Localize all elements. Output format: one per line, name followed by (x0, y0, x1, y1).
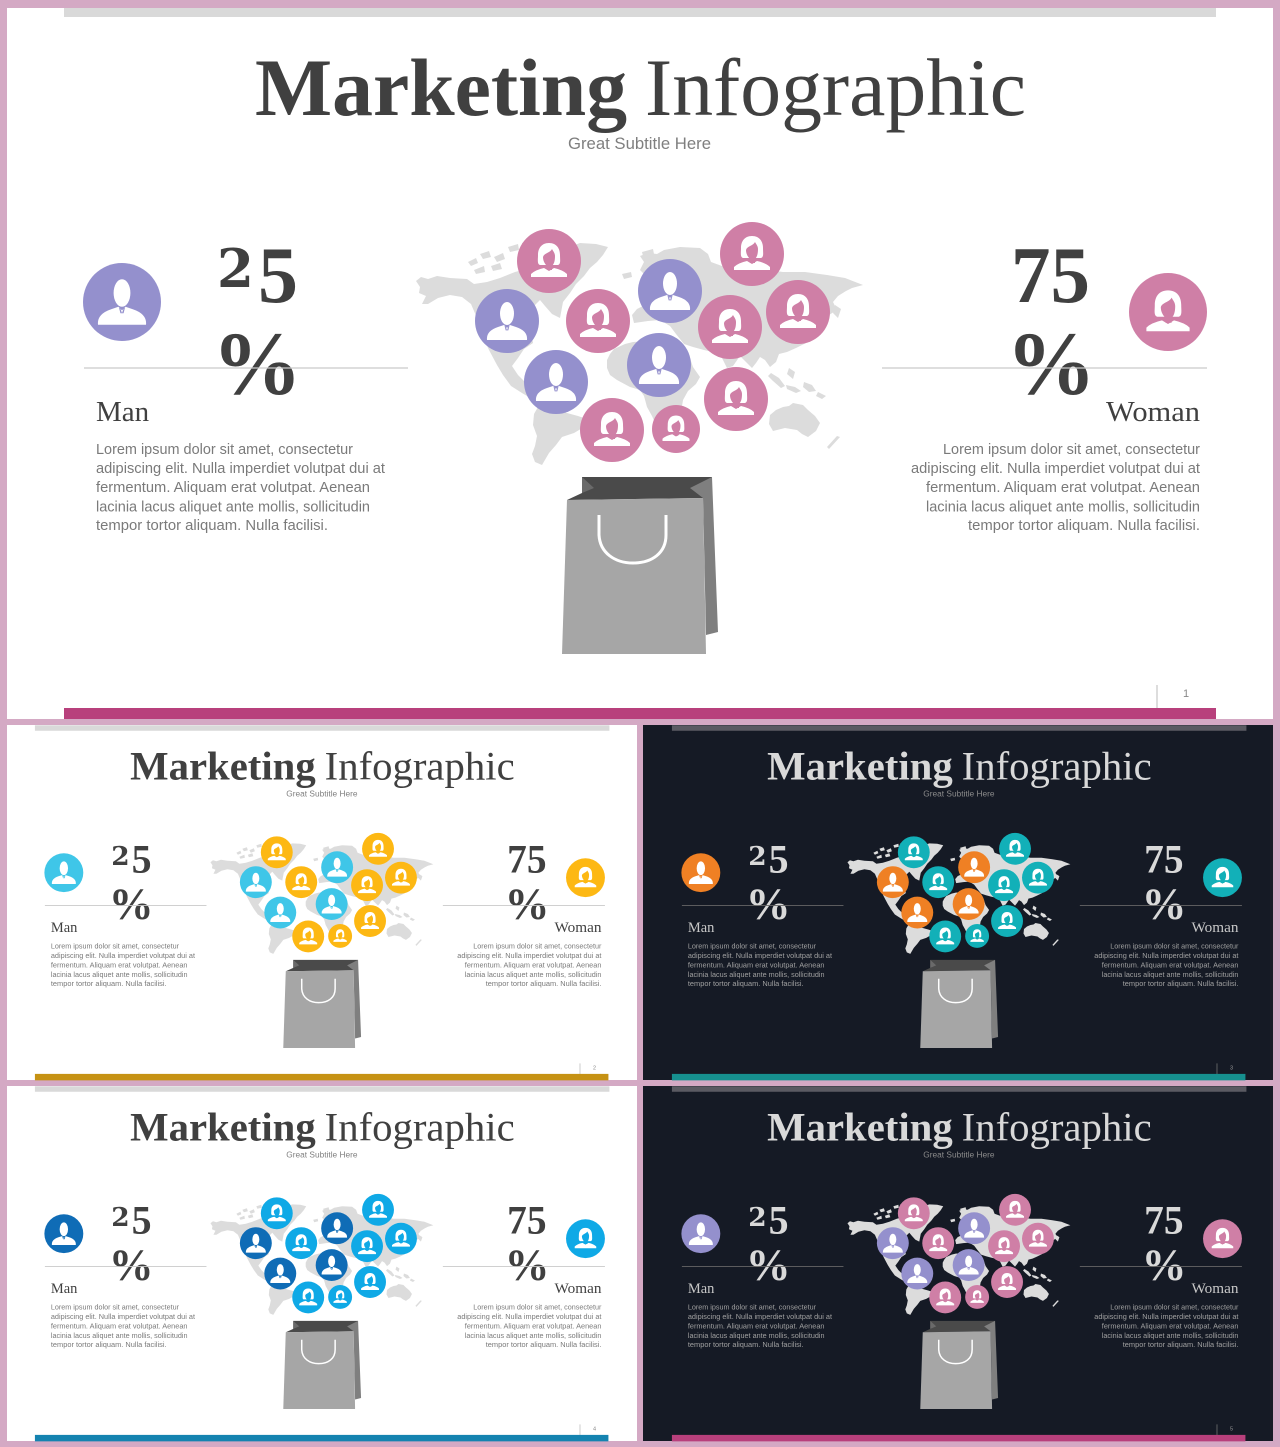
world map (210, 842, 433, 954)
icon: woman (1203, 1219, 1242, 1258)
text block: woman description: tempor tortor aliquam. Nulla facilisi. (1123, 1340, 1238, 1349)
world map (416, 241, 863, 465)
slide 1 title: Marketing (255, 42, 627, 133)
slide 5 bottom bar (672, 1435, 1245, 1441)
stat: 75 percent: % (1006, 315, 1096, 414)
stat: 75 percent (1142, 837, 1187, 929)
stat: 25 percent: % (109, 879, 154, 929)
label: Man: Man (688, 1281, 714, 1297)
text block: man description: tempor tortor aliquam. Nulla facilisi. (688, 1340, 804, 1349)
text block: woman description: Lorem ipsum dolor sit amet, consectetur (1110, 941, 1239, 950)
text block: man description: fermentum. Aliquam erat volutpat. Aenean (688, 1321, 825, 1330)
stat: 25 percent: 5 (258, 232, 298, 320)
people icon cluster (240, 1194, 417, 1313)
label: Woman: Woman (555, 920, 601, 936)
woman bubble (720, 222, 784, 286)
label: Woman: Woman (1192, 1281, 1238, 1297)
stat: 25 percent: % (212, 315, 302, 414)
slide 1 title: Infographic (645, 42, 1026, 133)
woman bubble small (652, 405, 700, 453)
text block: woman description: fermentum. Aliquam erat volutpat. Aenean (465, 960, 601, 969)
man bubble (638, 259, 702, 323)
text block: woman description (457, 1302, 602, 1349)
stat: 75 percent: % (1142, 879, 1187, 929)
slide 4 top bar (35, 1086, 609, 1092)
label: Man: Man (51, 920, 77, 936)
text block: woman description: lacinia lacus aliquet ante mollis, sollicitudin (926, 500, 1200, 516)
label: Woman: Woman (1192, 920, 1238, 936)
text block: man description: fermentum. Aliquam erat volutpat. Aenean (688, 960, 825, 969)
slide 2 title: Infographic (325, 744, 515, 789)
world map (847, 842, 1070, 954)
text block: man description: Lorem ipsum dolor sit amet, consectetur (96, 442, 353, 458)
stat: 75 percent (505, 837, 550, 929)
text block: man description: adipiscing elit. Nulla imperdiet volutpat dui at (51, 951, 195, 960)
stat: 25 percent: 5 (132, 1198, 152, 1243)
text block: man description: tempor tortor aliquam. Nulla facilisi. (51, 979, 167, 988)
text block: man description: fermentum. Aliquam erat volutpat. Aenean (96, 480, 370, 496)
text block: woman description: lacinia lacus aliquet ante mollis, sollicitudin (465, 970, 601, 979)
text block: woman description: fermentum. Aliquam erat volutpat. Aenean (926, 480, 1200, 496)
stat: 25 percent (109, 1198, 154, 1290)
slide 1 subtitle: Great Subtitle Here (568, 135, 711, 153)
stat: 25 percent (746, 837, 791, 929)
text block: man description (688, 941, 832, 988)
text block: woman description: Lorem ipsum dolor sit amet, consectetur (1110, 1302, 1239, 1311)
stat: 25 percent: 5 (769, 837, 789, 882)
people icon cluster (240, 833, 417, 952)
text block: woman description: adipiscing elit. Nulla imperdiet volutpat dui at (457, 951, 601, 960)
label: Man: Man (688, 920, 714, 936)
slide 5 title: Marketing (767, 1105, 953, 1150)
man bubble (627, 333, 691, 397)
slide 3 bottom bar (672, 1074, 1245, 1080)
slide 1 top bar (64, 8, 1216, 17)
stat: 25 percent (109, 837, 154, 929)
page number: 2 (593, 1065, 596, 1071)
slide 4 subtitle: Great Subtitle Here (286, 1151, 358, 1160)
text block: man description: adipiscing elit. Nulla imperdiet volutpat dui at (688, 1312, 832, 1321)
page number: 4 (593, 1426, 596, 1432)
text block: woman description: lacinia lacus aliquet ante mollis, sollicitudin (465, 1331, 601, 1340)
icon: woman (1129, 273, 1207, 351)
slide 3: dark slide, orange and teal (643, 725, 1273, 1080)
slide 1 background (7, 8, 1273, 719)
text block: woman description: tempor tortor aliquam. Nulla facilisi. (486, 1340, 601, 1349)
stat: 25 percent: 5 (132, 837, 152, 882)
stat: 75 percent: 75 (1011, 232, 1090, 320)
stat: 75 percent: % (505, 879, 550, 929)
text block: man description: fermentum. Aliquam erat volutpat. Aenean (51, 960, 188, 969)
woman bubble (766, 280, 830, 344)
slide 3 subtitle: Great Subtitle Here (923, 790, 995, 799)
stat: 25 percent: 2 (748, 841, 767, 872)
text block: man description: lacinia lacus aliquet ante mollis, sollicitudin (51, 970, 188, 979)
shopping bag (920, 960, 998, 1048)
icon: man (83, 263, 161, 341)
text block: woman description: adipiscing elit. Nulla imperdiet volutpat dui at (457, 1312, 601, 1321)
text block: man description: lacinia lacus aliquet ante mollis, sollicitudin (51, 1331, 188, 1340)
icon: woman (566, 858, 605, 897)
text block: woman description: Lorem ipsum dolor sit amet, consectetur (943, 442, 1200, 458)
icon: man (681, 853, 720, 892)
woman bubble (704, 367, 768, 431)
people icon cluster (475, 222, 830, 462)
people icon cluster (877, 833, 1054, 952)
shopping bag (920, 1321, 998, 1409)
page number: 3 (1230, 1065, 1233, 1071)
slide 3 title: Infographic (962, 744, 1152, 789)
slide 2 subtitle: Great Subtitle Here (286, 790, 358, 799)
text block: man description: adipiscing elit. Nulla imperdiet volutpat dui at (51, 1312, 195, 1321)
slide 2 top bar (35, 725, 609, 731)
world map (210, 1203, 433, 1315)
woman bubble (580, 398, 644, 462)
stat: 75 percent: % (1142, 1240, 1187, 1290)
stat: 25 percent: % (746, 879, 791, 929)
text block: man description (688, 1302, 832, 1349)
text block: woman description: adipiscing elit. Nulla imperdiet volutpat dui at (1094, 951, 1238, 960)
stat: 25 percent: 2 (748, 1202, 767, 1233)
stat: 25 percent: 2 (111, 841, 130, 872)
text block: man description: Lorem ipsum dolor sit amet, consectetur (51, 1302, 180, 1311)
stat: 75 percent: 75 (1144, 837, 1184, 882)
slide 5 content (672, 1086, 1246, 1441)
slide 5 background (643, 1086, 1273, 1441)
slide 3 top bar (672, 725, 1246, 731)
slide 4 bottom bar (35, 1435, 608, 1441)
text block: man description: Lorem ipsum dolor sit amet, consectetur (51, 941, 180, 950)
stat: 75 percent: % (505, 1240, 550, 1290)
slide 5 top bar (672, 1086, 1246, 1092)
text block: woman description: lacinia lacus aliquet ante mollis, sollicitudin (1102, 970, 1238, 979)
slide 5 title: Infographic (962, 1105, 1152, 1150)
text block: woman description (911, 442, 1200, 534)
stat: 25 percent: 2 (217, 238, 254, 300)
text block: woman description: fermentum. Aliquam erat volutpat. Aenean (1102, 1321, 1238, 1330)
text block: man description: Lorem ipsum dolor sit amet, consectetur (688, 941, 817, 950)
icon: man (44, 853, 83, 892)
slide 3 content (672, 725, 1246, 1080)
label: Woman: Woman (1106, 396, 1201, 428)
woman bubble (517, 229, 581, 293)
slide 1 bottom bar (64, 708, 1216, 719)
slide 4 title: Infographic (325, 1105, 515, 1150)
stat: 25 percent (212, 232, 302, 414)
slide 4 background (7, 1086, 637, 1441)
text block: man description: lacinia lacus aliquet ante mollis, sollicitudin (96, 500, 370, 516)
text block: woman description (457, 941, 602, 988)
slide 4 content (35, 1086, 609, 1441)
woman bubble (698, 295, 762, 359)
text block: woman description (1094, 1302, 1239, 1349)
shopping bag (562, 477, 718, 654)
text block: woman description: Lorem ipsum dolor sit amet, consectetur (473, 1302, 602, 1311)
stat: 75 percent (505, 1198, 550, 1290)
slide 1: main light slide, pink and lavender (7, 8, 1273, 719)
slide 5 subtitle: Great Subtitle Here (923, 1151, 995, 1160)
text block: man description: tempor tortor aliquam. Nulla facilisi. (688, 979, 804, 988)
shopping bag (283, 960, 361, 1048)
text block: woman description: tempor tortor aliquam. Nulla facilisi. (486, 979, 601, 988)
text block: woman description (1094, 941, 1239, 988)
label: Man: Man (96, 396, 150, 428)
stat: 25 percent: 2 (111, 1202, 130, 1233)
page number: 5 (1230, 1426, 1233, 1432)
text block: woman description: lacinia lacus aliquet ante mollis, sollicitudin (1102, 1331, 1238, 1340)
text block: man description: adipiscing elit. Nulla imperdiet volutpat dui at (96, 461, 385, 477)
text block: woman description: fermentum. Aliquam erat volutpat. Aenean (465, 1321, 601, 1330)
text block: woman description: tempor tortor aliquam. Nulla facilisi. (1123, 979, 1238, 988)
text block: man description: fermentum. Aliquam erat volutpat. Aenean (51, 1321, 188, 1330)
slide 2 title: Marketing (130, 744, 316, 789)
icon: man (681, 1214, 720, 1253)
label: Woman: Woman (555, 1281, 601, 1297)
text block: woman description: tempor tortor aliquam. Nulla facilisi. (968, 518, 1200, 534)
shopping bag (283, 1321, 361, 1409)
man bubble (524, 350, 588, 414)
icon: woman (566, 1219, 605, 1258)
text block: man description: tempor tortor aliquam. Nulla facilisi. (96, 518, 328, 534)
world map (847, 1203, 1070, 1315)
slide 3 background (643, 725, 1273, 1080)
woman bubble (566, 289, 630, 353)
text block: man description (51, 941, 195, 988)
text block: woman description: adipiscing elit. Nulla imperdiet volutpat dui at (1094, 1312, 1238, 1321)
slide 5: dark slide, pink and lavender (643, 1086, 1273, 1441)
slide 4 title: Marketing (130, 1105, 316, 1150)
slide 4: light slide, blue tones (7, 1086, 637, 1441)
text block: woman description: Lorem ipsum dolor sit amet, consectetur (473, 941, 602, 950)
text block: man description: adipiscing elit. Nulla imperdiet volutpat dui at (688, 951, 832, 960)
stat: 25 percent: 5 (769, 1198, 789, 1243)
text block: woman description: fermentum. Aliquam erat volutpat. Aenean (1102, 960, 1238, 969)
slide 2 background (7, 725, 637, 1080)
stat: 25 percent (746, 1198, 791, 1290)
icon: man (44, 1214, 83, 1253)
text block: man description: lacinia lacus aliquet ante mollis, sollicitudin (688, 970, 825, 979)
text block: man description (96, 442, 385, 534)
text block: man description: Lorem ipsum dolor sit amet, consectetur (688, 1302, 817, 1311)
stat: 75 percent (1006, 232, 1096, 414)
icon: woman (1203, 858, 1242, 897)
stat: 25 percent: % (109, 1240, 154, 1290)
stat: 75 percent: 75 (1144, 1198, 1184, 1243)
slide 2 bottom bar (35, 1074, 608, 1080)
label: Man: Man (51, 1281, 77, 1297)
slide 3 title: Marketing (767, 744, 953, 789)
text block: man description: lacinia lacus aliquet ante mollis, sollicitudin (688, 1331, 825, 1340)
page number: 1 (1183, 688, 1189, 700)
slide 2 content (35, 725, 609, 1080)
stat: 75 percent (1142, 1198, 1187, 1290)
slide 2: light slide, yellow and cyan (7, 725, 637, 1080)
stat: 25 percent: % (746, 1240, 791, 1290)
man bubble (475, 289, 539, 353)
people icon cluster (877, 1194, 1054, 1313)
stat: 75 percent: 75 (507, 837, 547, 882)
stat: 75 percent: 75 (507, 1198, 547, 1243)
text block: man description: tempor tortor aliquam. Nulla facilisi. (51, 1340, 167, 1349)
text block: woman description: adipiscing elit. Nulla imperdiet volutpat dui at (911, 461, 1200, 477)
text block: man description (51, 1302, 195, 1349)
